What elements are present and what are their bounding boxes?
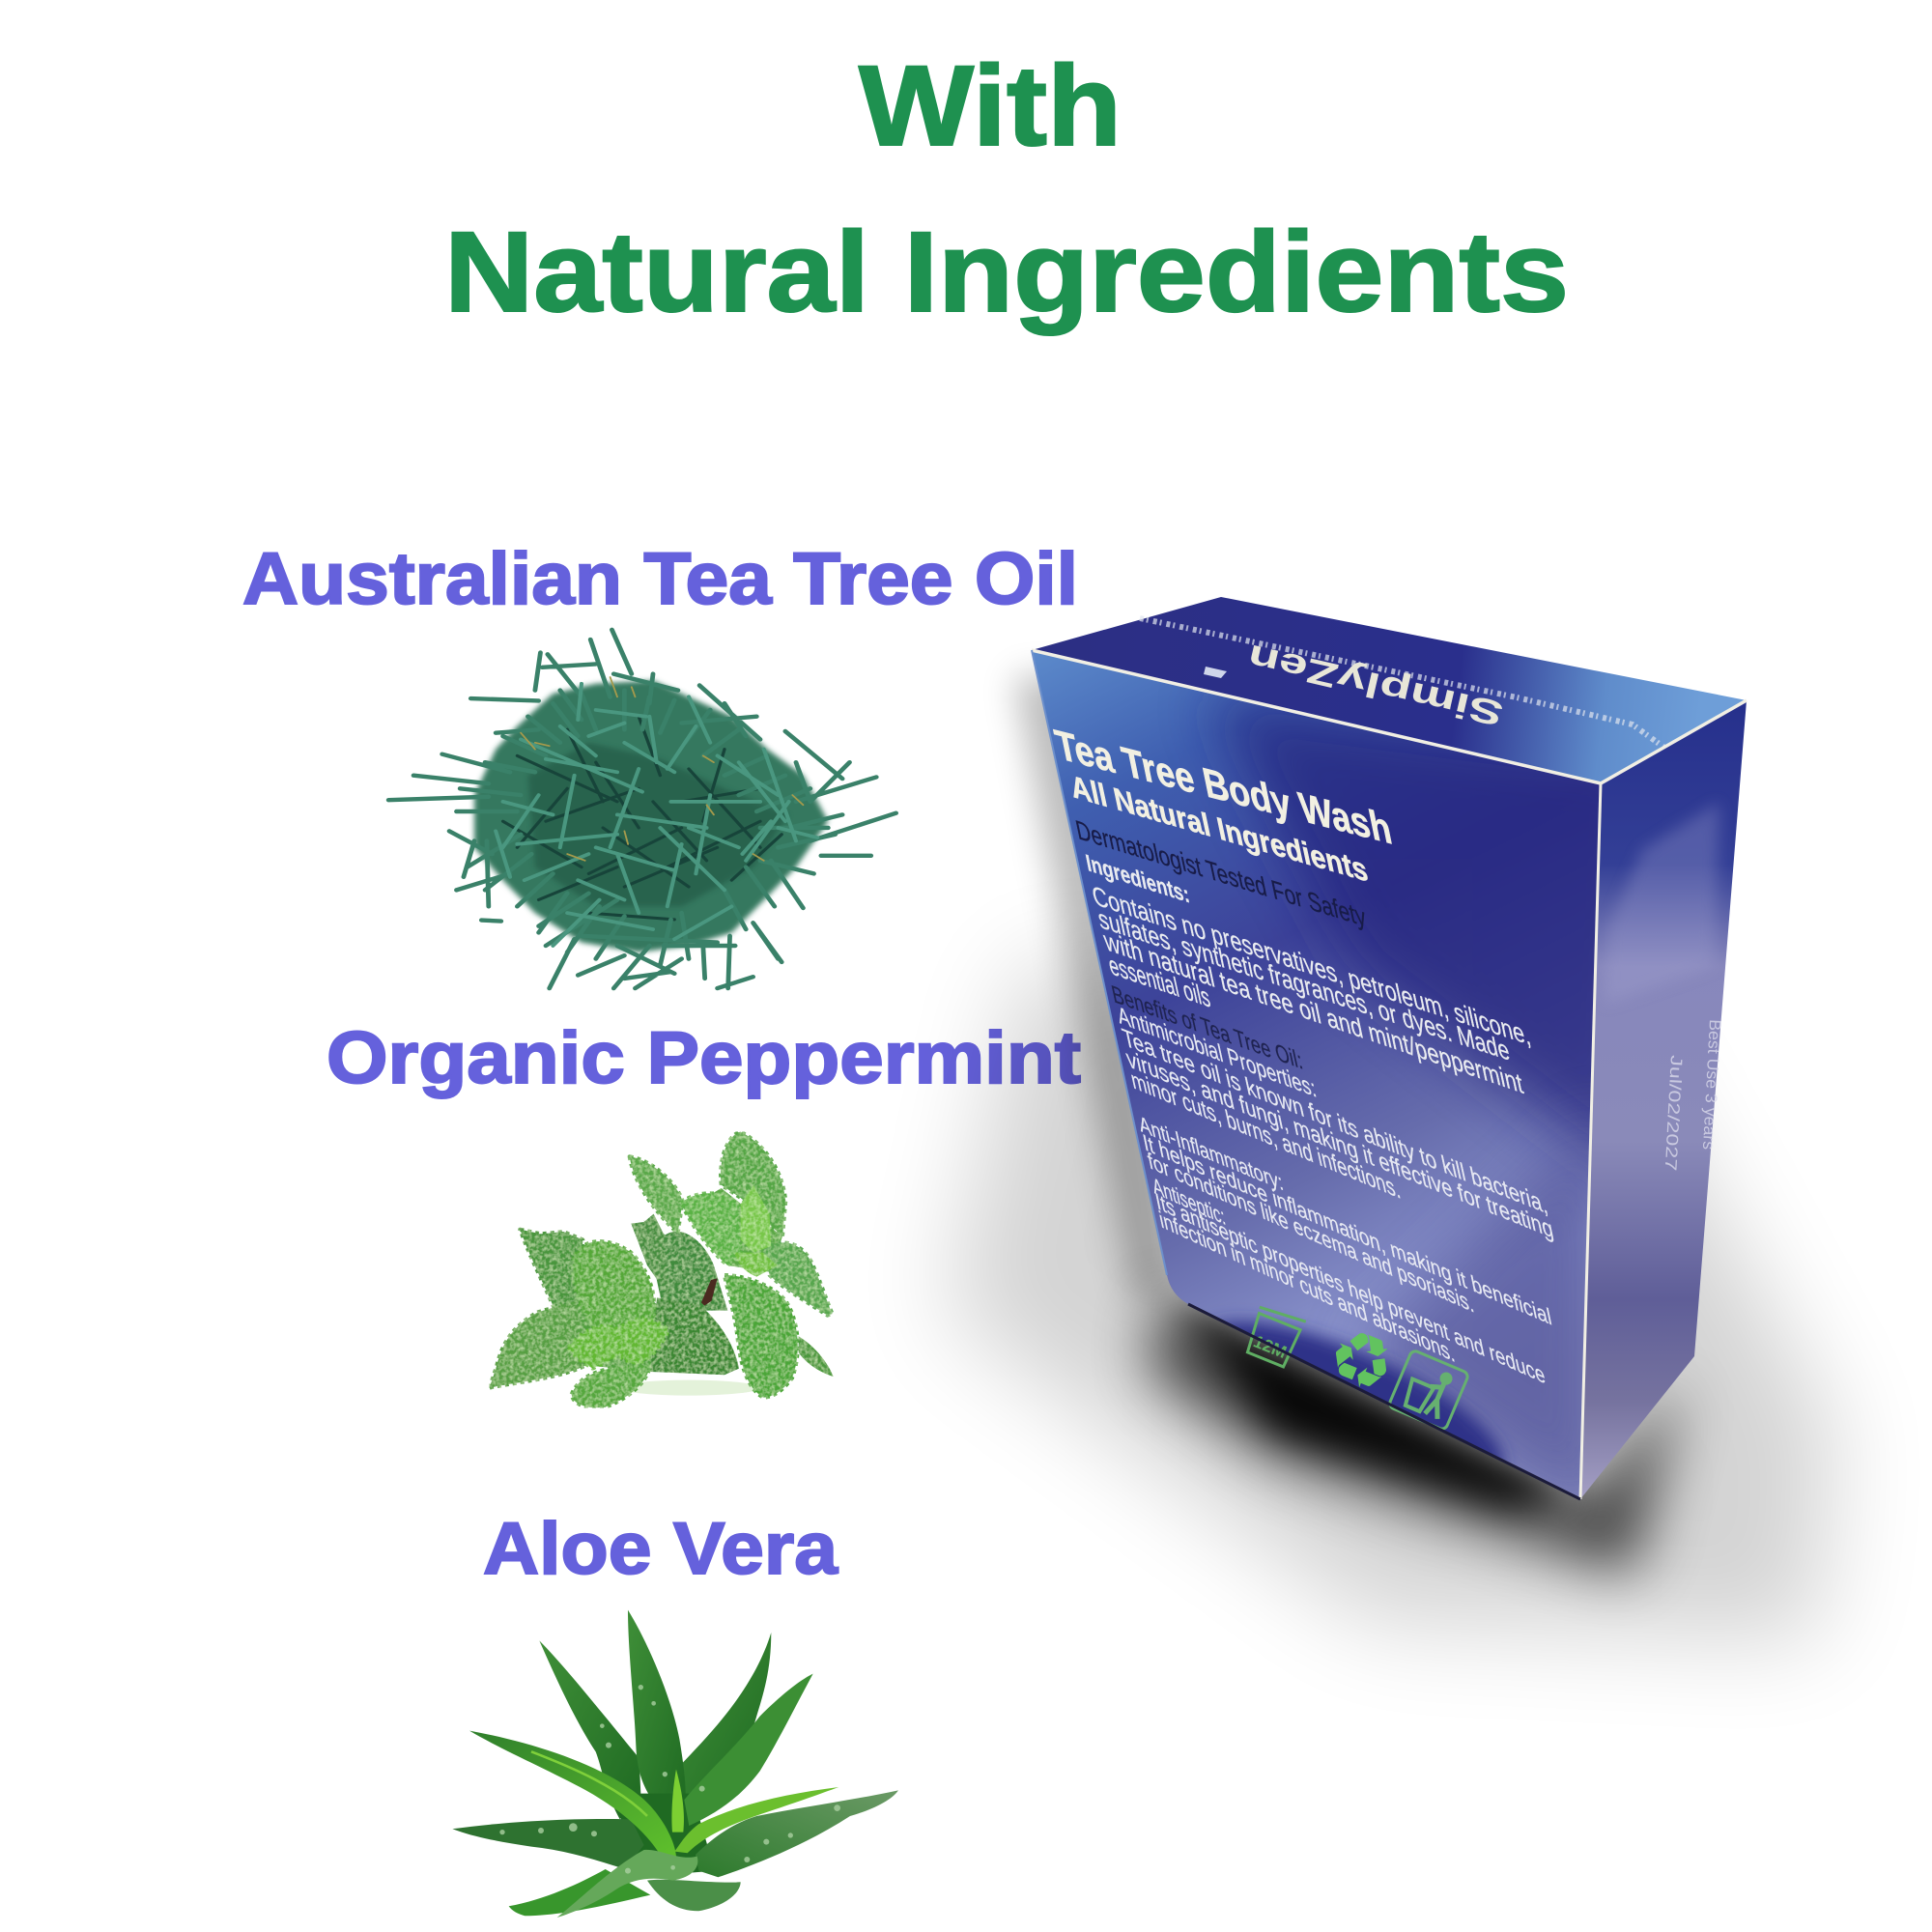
front face benefits text: Its antiseptic properties help prevent and reduce xyxy=(1153,1187,1548,1389)
front face heading: All Natural Ingredients xyxy=(1067,768,1371,889)
front face benefits text: Antimicrobial Properties: xyxy=(1115,1002,1319,1103)
front face ingredients text: Dermatologist Tested For Safety xyxy=(1073,814,1369,933)
box side face xyxy=(1580,700,1747,1499)
front face ingredients text xyxy=(1073,814,1533,1100)
top face brand name: SimplyZen xyxy=(1243,637,1507,734)
side face date text: Jul/02/2027 xyxy=(1662,1055,1686,1172)
front face ingredients text: with natural tea tree oil and mint/peppermint xyxy=(1100,923,1526,1100)
label: Organic Peppermint: Organic Peppermint xyxy=(327,1017,1081,1099)
front face benefits text: viruses, and fungi, making it effective for treating xyxy=(1123,1045,1556,1245)
front face benefits text: minor cuts, burns, and infections. xyxy=(1128,1066,1404,1206)
side face date text: Best Use 3 years xyxy=(1699,1019,1724,1151)
box front face xyxy=(1034,652,1600,1497)
front face benefits text: for conditions like eczema and psoriasis. xyxy=(1145,1147,1476,1318)
product box xyxy=(1032,597,1747,1526)
icon: aloe vera plant xyxy=(452,1610,898,1918)
side face date text xyxy=(1662,1019,1724,1172)
front face ingredients text: Ingredients: xyxy=(1084,850,1192,909)
icon: tea tree leaves xyxy=(388,630,896,988)
box top face xyxy=(1032,597,1747,783)
front face benefits text: infection in minor cuts and abrasions. xyxy=(1156,1205,1457,1368)
front face benefits text: Benefits of Tea Tree Oil: xyxy=(1109,980,1305,1075)
front face benefits text: Tea tree oil is known for its ability to kill bacteria, xyxy=(1120,1024,1550,1220)
front face benefits text: Antiseptic: xyxy=(1150,1172,1228,1231)
icon: jar 12M xyxy=(1242,1303,1306,1368)
label: Australian Tea Tree Oil: Australian Tea Tree Oil xyxy=(242,538,1078,620)
icon: recycle: ♻ xyxy=(1315,1308,1408,1412)
box drop shadow xyxy=(947,676,1835,1642)
title xyxy=(444,43,1569,336)
icon: trash bin figure xyxy=(1388,1350,1469,1431)
title: Natural Ingredients xyxy=(444,209,1569,336)
front face benefits text xyxy=(1109,980,1556,1389)
front face benefits text: It helps reduce inflammation, making it beneficial xyxy=(1141,1129,1554,1330)
box white edges xyxy=(1032,650,1747,1499)
icon: peppermint leaves xyxy=(490,1132,834,1407)
front face ingredients text: sulfates, synthetic fragrances, or dyes. Made xyxy=(1095,903,1512,1066)
front face ingredients text: essential oils xyxy=(1105,949,1213,1013)
front face heading: Tea Tree Body Wash xyxy=(1051,721,1396,853)
icon: jar 12M: 12M xyxy=(1251,1331,1290,1362)
front face benefits text: Anti-Inflammatory: xyxy=(1136,1111,1286,1196)
label: Aloe Vera: Aloe Vera xyxy=(483,1508,838,1590)
title: With xyxy=(859,43,1122,170)
front face ingredients text: Contains no preservatives, petroleum, silicone, xyxy=(1090,880,1533,1052)
